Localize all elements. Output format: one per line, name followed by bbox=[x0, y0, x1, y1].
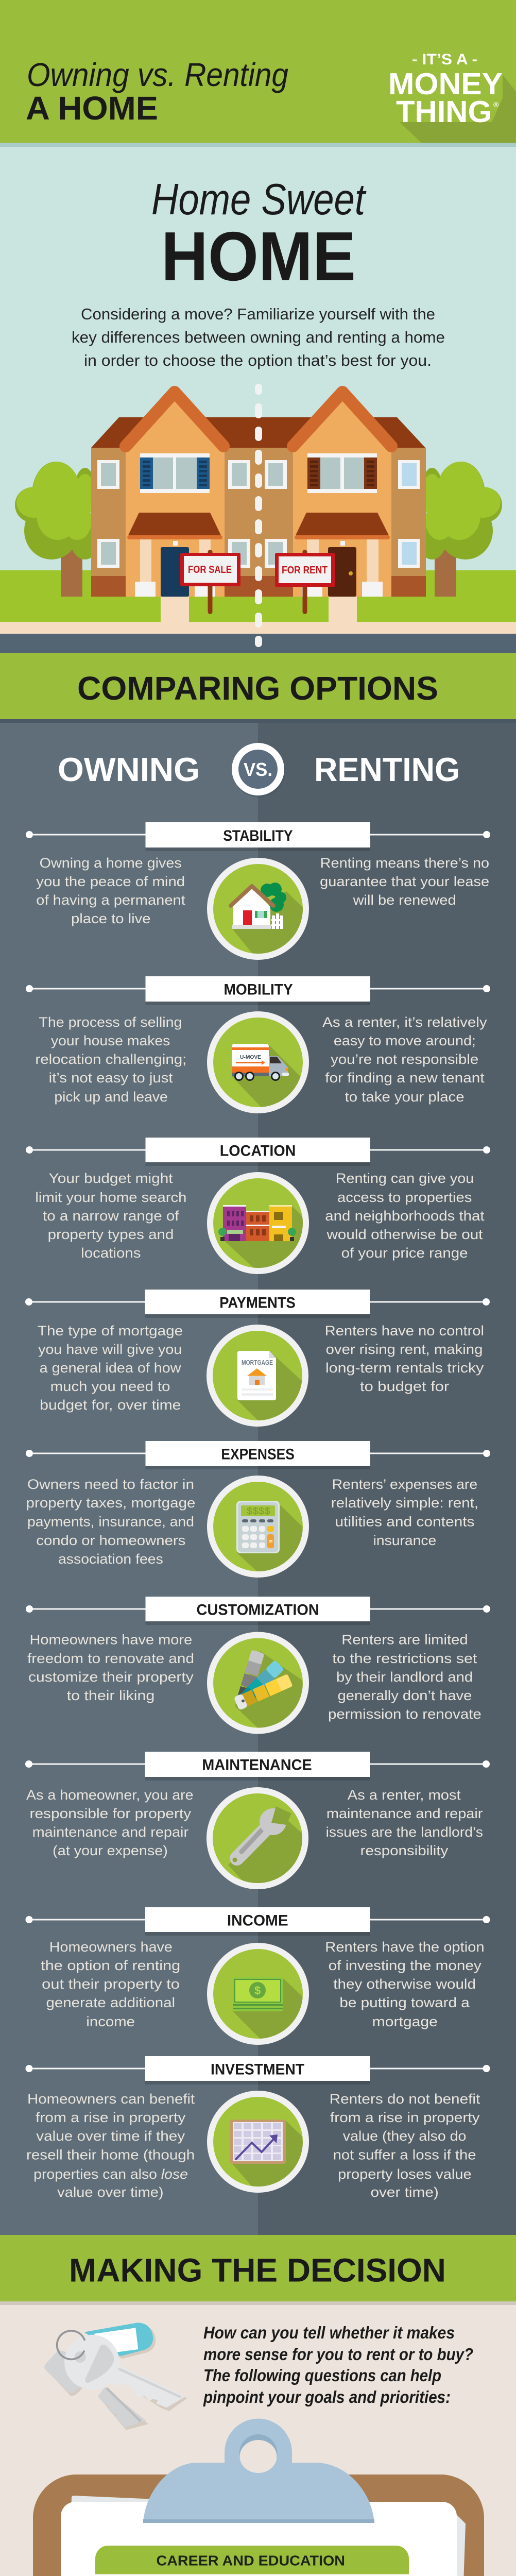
text: owning payments: you have will give you bbox=[38, 1342, 182, 1357]
text: renting income bbox=[325, 1939, 485, 2029]
text: owning customization: customize their property bbox=[28, 1669, 194, 1685]
section: career and education: CAREER AND EDUCATION bbox=[157, 2552, 345, 2569]
icon: for sale sign: FOR SALE bbox=[188, 564, 232, 575]
section: career and education bbox=[95, 2546, 416, 2576]
text: renting income: Renters have the option bbox=[325, 1939, 485, 1955]
category bar: stability: STABILITY bbox=[223, 827, 293, 844]
panel: investment bbox=[26, 2056, 490, 2200]
column headings: owning vs renting bbox=[58, 743, 460, 798]
text: renting expenses: Renters’ expenses are bbox=[332, 1477, 477, 1492]
panel: clipboard bbox=[33, 2418, 484, 2576]
text: owning investment bbox=[26, 2091, 195, 2200]
text: renting location: of your price range bbox=[341, 1245, 468, 1261]
text: intro paragraph: key differences between owning and renting a home bbox=[72, 328, 445, 346]
category bar: mobility bbox=[26, 976, 490, 1005]
category bar: income bbox=[26, 1907, 490, 1936]
panel: intro bbox=[0, 147, 516, 574]
text: renting mobility: As a renter, it’s relatively bbox=[322, 1014, 487, 1030]
house: windows bbox=[97, 453, 420, 568]
category bar: mobility: MOBILITY bbox=[223, 981, 293, 998]
category bar: payments bbox=[25, 1290, 490, 1318]
text: owning mobility: The process of selling bbox=[39, 1014, 182, 1030]
icon: calculator bbox=[207, 1476, 309, 1578]
panel: decision background bbox=[0, 2301, 516, 2576]
text: renting investment: over time) bbox=[371, 2184, 439, 2200]
text: owning customization: freedom to renovate and bbox=[27, 1651, 194, 1666]
text: renting mobility: for finding a new tenant bbox=[325, 1070, 485, 1086]
text: renting income: they otherwise would bbox=[333, 1976, 476, 1992]
column headings: owning vs renting: VS. bbox=[244, 759, 272, 780]
icon: mortgage document bbox=[207, 1325, 308, 1427]
icon: house bbox=[207, 858, 309, 960]
text: owning location: Your budget might bbox=[49, 1171, 173, 1186]
text: renting maintenance bbox=[326, 1787, 483, 1858]
text: owning payments: a general idea of how bbox=[40, 1360, 181, 1376]
text: decision intro: How can you tell whether it makes bbox=[203, 2323, 455, 2342]
text: renting payments: long-term rentals tricky bbox=[325, 1360, 484, 1376]
text: owning location bbox=[35, 1171, 186, 1261]
category bar: payments: PAYMENTS bbox=[219, 1294, 296, 1312]
text: owning investment: value over time if they bbox=[36, 2128, 185, 2144]
clipboard: clip bbox=[143, 2418, 374, 2523]
category bar: expenses: EXPENSES bbox=[221, 1446, 295, 1463]
text: renting expenses: utilities and contents bbox=[335, 1514, 475, 1529]
text: owning mobility: relocation challenging; bbox=[35, 1052, 186, 1067]
text: renting mobility: to take your place bbox=[345, 1089, 465, 1105]
title: owning vs renting a home: Owning vs. Renting bbox=[27, 56, 288, 93]
text: owning expenses: condo or homeowners bbox=[36, 1533, 185, 1548]
text: owning payments: much you need to bbox=[50, 1379, 170, 1394]
clipboard: papers bbox=[48, 2498, 463, 2576]
text: owning customization: Homeowners have more bbox=[30, 1632, 192, 1648]
text: renting payments: over rising rent, making bbox=[326, 1342, 483, 1357]
icon: left tree bbox=[15, 462, 100, 597]
text: owning mobility: your house makes bbox=[51, 1033, 170, 1048]
text: owning expenses: Owners need to factor in bbox=[27, 1477, 194, 1492]
text: owning expenses: association fees bbox=[58, 1551, 163, 1567]
icon: stack of money: $ bbox=[254, 1984, 261, 1997]
text: owning customization bbox=[27, 1632, 194, 1703]
heading: home sweet home bbox=[151, 175, 367, 295]
text: owning income: the option of renting bbox=[41, 1958, 180, 1973]
text: renting customization: permission to renovate bbox=[328, 1706, 481, 1722]
text: renting investment: Renters do not benefit bbox=[330, 2091, 480, 2107]
text: renting location: Renting can give you bbox=[336, 1171, 474, 1186]
text: owning mobility bbox=[35, 1014, 186, 1105]
text: owning investment: resell their home (though bbox=[26, 2147, 195, 2163]
text: owning mobility: pick up and leave bbox=[54, 1089, 168, 1105]
text: owning income: generate additional bbox=[46, 1995, 175, 2010]
text: owning customization: to their liking bbox=[67, 1688, 154, 1703]
category bar: expenses bbox=[26, 1441, 490, 1469]
logo: it's a money thing: - IT’S A - bbox=[412, 51, 477, 68]
category bar: investment: INVESTMENT bbox=[211, 2061, 304, 2078]
house: porches and doors bbox=[127, 513, 390, 597]
text: intro paragraph: in order to choose the option that’s best for you. bbox=[84, 351, 432, 369]
text: owning stability: Owning a home gives bbox=[40, 855, 182, 871]
text: owning investment: Homeowners can benefit bbox=[27, 2091, 195, 2107]
text: owning expenses: payments, insurance, and bbox=[27, 1514, 194, 1529]
text: decision intro: The following questions can help bbox=[203, 2366, 441, 2385]
category bar: maintenance bbox=[25, 1752, 490, 1781]
text: renting income: be putting toward a bbox=[339, 1995, 470, 2010]
icon: paint swatches bbox=[207, 1632, 309, 1734]
icon: for sale sign bbox=[180, 550, 240, 614]
clipboard: board bbox=[33, 2475, 484, 2576]
text: renting payments bbox=[325, 1323, 484, 1394]
panel: customization bbox=[26, 1597, 490, 1734]
text: intro paragraph bbox=[72, 305, 445, 369]
icon: rising chart bbox=[207, 2091, 309, 2193]
text: renting maintenance: As a renter, most bbox=[348, 1787, 461, 1803]
text: owning payments: The type of mortgage bbox=[38, 1323, 183, 1338]
logo: it's a money thing: THING bbox=[396, 95, 492, 129]
text: renting expenses: relatively simple: rent, bbox=[331, 1495, 478, 1511]
illustration: two houses for sale and for rent bbox=[0, 384, 516, 653]
icon: city buildings bbox=[207, 1172, 309, 1274]
icon: keys bbox=[44, 2323, 187, 2430]
text: renting stability bbox=[320, 855, 489, 908]
text: owning maintenance: As a homeowner, you are bbox=[26, 1787, 194, 1803]
text: renting stability: Renting means there’s no bbox=[320, 855, 489, 871]
panel: income bbox=[26, 1907, 490, 2045]
logo: it's a money thing: MONEY bbox=[388, 67, 503, 101]
text: renting customization: by their landlord and bbox=[336, 1669, 473, 1685]
text: renting mobility: easy to move around; bbox=[334, 1033, 476, 1048]
icon: mortgage document: MORTGAGE bbox=[242, 1359, 273, 1366]
text: renting customization: generally don’t have bbox=[338, 1688, 472, 1703]
text: renting location: and neighborhoods that bbox=[325, 1208, 485, 1224]
panel: stability bbox=[26, 822, 490, 960]
text: owning investment: properties can also lose bbox=[33, 2166, 188, 2182]
text: owning investment: value over time) bbox=[57, 2184, 164, 2200]
category bar: location: LOCATION bbox=[220, 1143, 296, 1159]
heading band: comparing options bbox=[0, 653, 516, 719]
icon: calculator: $$$$ bbox=[247, 1506, 270, 1516]
text: owning income: Homeowners have bbox=[49, 1939, 173, 1955]
text: owning location: to a narrow range of bbox=[43, 1208, 179, 1224]
text: decision intro bbox=[203, 2323, 473, 2406]
text: renting investment: from a rise in property bbox=[330, 2110, 480, 2125]
text: owning location: locations bbox=[81, 1245, 141, 1261]
text: renting maintenance: maintenance and repair bbox=[326, 1806, 483, 1821]
category bar: maintenance: MAINTENANCE bbox=[202, 1757, 312, 1773]
title: owning vs renting a home bbox=[26, 56, 288, 127]
text: renting maintenance: responsibility bbox=[360, 1843, 449, 1858]
text: intro paragraph: Considering a move? Familiarize yourself with the bbox=[81, 305, 435, 323]
house: building body bbox=[91, 392, 426, 597]
logo: it's a money thing bbox=[388, 51, 516, 143]
icon: for rent sign bbox=[275, 550, 335, 614]
panel: maintenance bbox=[25, 1752, 490, 1889]
text: owning income: out their property to bbox=[42, 1976, 180, 1992]
text: owning income: income bbox=[86, 2014, 135, 2029]
category bar: customization: CUSTOMIZATION bbox=[197, 1601, 319, 1619]
text: owning maintenance: (at your expense) bbox=[53, 1843, 168, 1858]
text: owning maintenance: maintenance and repair bbox=[32, 1824, 188, 1840]
text: owning location: limit your home search bbox=[35, 1190, 186, 1205]
category bar: income: INCOME bbox=[227, 1912, 288, 1929]
text: owning stability: place to live bbox=[71, 911, 151, 926]
panel: header banner bbox=[0, 0, 516, 147]
text: renting expenses bbox=[331, 1477, 478, 1548]
heading band: making the decision bbox=[0, 2235, 516, 2301]
panel: location bbox=[26, 1138, 490, 1274]
text: owning stability: of having a permanent bbox=[36, 892, 185, 908]
text: renting customization: to the restrictions set bbox=[332, 1651, 477, 1666]
icon: moving truck: U-MOVE bbox=[240, 1055, 261, 1060]
text: owning maintenance bbox=[26, 1787, 194, 1858]
divider: dashed centre line bbox=[255, 384, 262, 647]
icon: for rent sign: FOR RENT bbox=[282, 565, 328, 576]
column headings: owning vs renting: OWNING bbox=[58, 751, 200, 788]
text: renting customization: Renters are limited bbox=[341, 1632, 468, 1648]
text: renting income: mortgage bbox=[372, 2014, 438, 2029]
text: renting investment bbox=[330, 2091, 480, 2200]
text: renting payments: to budget for bbox=[360, 1379, 449, 1394]
column headings: owning vs renting: RENTING bbox=[314, 751, 460, 788]
category bar: customization bbox=[26, 1597, 490, 1625]
heading: home sweet home: Home Sweet bbox=[151, 175, 367, 224]
text: decision intro: pinpoint your goals and priorities: bbox=[203, 2387, 451, 2406]
panel: mobility bbox=[26, 976, 490, 1113]
text: owning expenses: property taxes, mortgage bbox=[26, 1495, 196, 1511]
text: owning expenses bbox=[26, 1477, 196, 1567]
heading band: comparing options: COMPARING OPTIONS bbox=[77, 670, 438, 707]
text: renting payments: Renters have no control bbox=[325, 1323, 484, 1338]
text: renting location bbox=[325, 1171, 485, 1261]
category bar: investment bbox=[26, 2056, 490, 2084]
icon: moving truck bbox=[207, 1011, 309, 1113]
text: renting stability: will be renewed bbox=[353, 892, 456, 908]
icon: right tree bbox=[417, 462, 502, 597]
category bar: location bbox=[26, 1138, 490, 1166]
text: decision intro: more sense for you to rent or to buy? bbox=[203, 2345, 473, 2364]
text: owning location: property types and bbox=[48, 1227, 174, 1242]
text: renting investment: property loses value bbox=[338, 2166, 472, 2182]
text: renting location: access to properties bbox=[337, 1190, 472, 1205]
panel: expenses bbox=[26, 1441, 490, 1578]
text: renting customization bbox=[328, 1632, 481, 1722]
logo: it's a money thing: ® bbox=[493, 100, 499, 109]
text: renting expenses: insurance bbox=[373, 1533, 436, 1548]
text: owning mobility: it’s not easy to just bbox=[49, 1070, 173, 1086]
text: renting investment: not suffer a loss if the bbox=[333, 2147, 476, 2163]
panel: comparison background bbox=[0, 719, 516, 2235]
text: renting stability: guarantee that your lease bbox=[320, 874, 489, 889]
text: owning maintenance: responsible for property bbox=[30, 1806, 192, 1821]
text: owning investment: from a rise in property bbox=[36, 2110, 186, 2125]
icon: stack of money bbox=[207, 1943, 309, 2045]
text: renting mobility bbox=[322, 1014, 487, 1105]
text: renting maintenance: issues are the landlord’s bbox=[326, 1824, 483, 1840]
text: renting mobility: you’re not responsible bbox=[331, 1052, 478, 1067]
text: owning payments bbox=[38, 1323, 183, 1413]
text: renting income: of investing the money bbox=[329, 1958, 481, 1973]
icon: wrench bbox=[207, 1787, 308, 1889]
heading: home sweet home: HOME bbox=[161, 217, 356, 295]
text: renting investment: value (they also do bbox=[343, 2128, 466, 2144]
heading band: making the decision: MAKING THE DECISION bbox=[69, 2251, 446, 2289]
text: owning stability: you the peace of mind bbox=[36, 874, 185, 889]
text: owning payments: budget for, over time bbox=[40, 1397, 181, 1413]
panel: payments bbox=[25, 1290, 490, 1427]
text: owning stability bbox=[36, 855, 185, 926]
category bar: stability bbox=[26, 822, 490, 851]
title: owning vs renting a home: A HOME bbox=[26, 90, 158, 127]
text: renting location: would otherwise be out bbox=[326, 1227, 483, 1242]
text: owning income bbox=[41, 1939, 180, 2029]
